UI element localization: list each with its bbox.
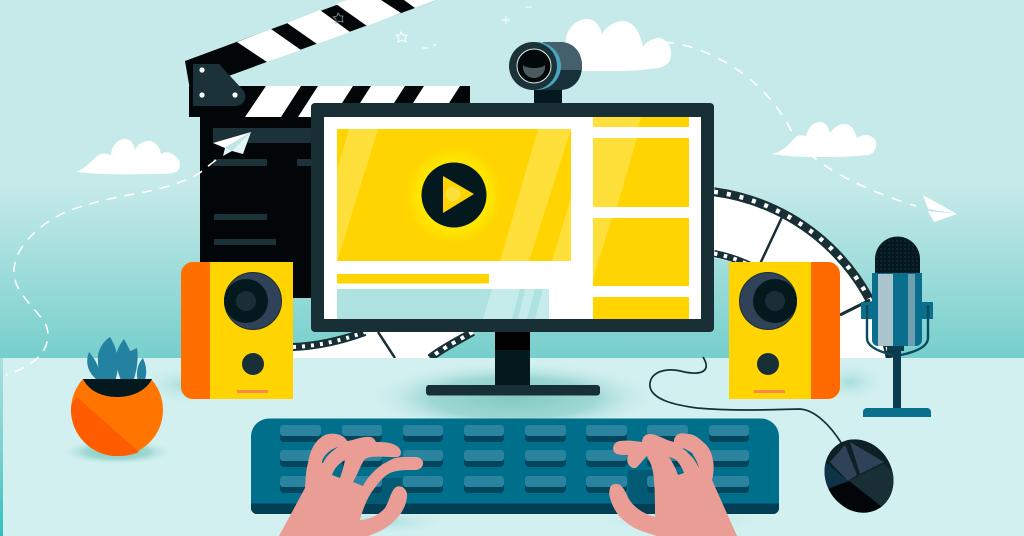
description block bbox=[337, 289, 549, 319]
webcam bbox=[509, 42, 582, 104]
webcam neck bbox=[534, 88, 562, 104]
clapper hinge bbox=[193, 64, 245, 106]
tweeter bbox=[757, 353, 779, 375]
keyboard body bbox=[251, 418, 779, 514]
desk bbox=[3, 358, 1024, 536]
play button bbox=[422, 162, 486, 228]
background sky bbox=[0, 0, 1024, 358]
pot bbox=[71, 379, 163, 456]
dashed path: right flight bbox=[664, 42, 916, 206]
main video bbox=[337, 129, 571, 262]
mic clips bbox=[861, 302, 872, 319]
plant bbox=[71, 337, 163, 456]
woofer bbox=[740, 272, 796, 330]
video title bar bbox=[337, 274, 489, 284]
webcam lens bbox=[509, 42, 557, 90]
monitor stand bbox=[426, 332, 600, 396]
sidebar thumbnails bbox=[593, 117, 689, 319]
mic body bbox=[872, 273, 922, 346]
film reel: right section bbox=[714, 188, 894, 358]
clapper lower bar bbox=[189, 86, 470, 117]
mouse cable bbox=[650, 357, 842, 444]
indicator bbox=[754, 390, 785, 393]
dashed path: left flight bbox=[6, 160, 216, 375]
mic stand bbox=[893, 350, 901, 408]
clapper stick bbox=[185, 0, 437, 90]
paper plane: right bbox=[923, 195, 957, 222]
hand: left bbox=[279, 434, 423, 536]
mic head bbox=[875, 236, 920, 273]
clapper body bbox=[200, 117, 340, 298]
paper plane: left bbox=[213, 132, 251, 156]
cloud: top centre bbox=[545, 19, 671, 71]
woofer bbox=[224, 272, 282, 330]
decorative stars bbox=[396, 7, 532, 48]
keyboard bbox=[251, 418, 779, 514]
webcam teal rim bbox=[513, 42, 561, 90]
mic cradle bbox=[867, 305, 928, 355]
mouse bbox=[824, 439, 894, 513]
monitor bbox=[311, 103, 714, 332]
clapper text lines bbox=[213, 128, 313, 245]
film reel: lower left section bbox=[293, 332, 473, 358]
key row 3 bbox=[280, 476, 749, 493]
key row 2 bbox=[280, 450, 749, 467]
plant leaves bbox=[87, 337, 146, 386]
speaker: left bbox=[181, 262, 293, 399]
soil bbox=[83, 379, 152, 397]
indicator bbox=[237, 390, 268, 393]
desk shadows bbox=[69, 367, 873, 530]
hand: right bbox=[609, 433, 737, 536]
microphone bbox=[861, 236, 933, 417]
cloud: left bbox=[76, 139, 180, 174]
tweeter bbox=[242, 353, 264, 375]
speaker: right bbox=[729, 262, 840, 399]
cloud: right bbox=[772, 122, 876, 157]
glow bbox=[405, 146, 503, 244]
left edge strip bbox=[0, 358, 3, 536]
webcam barrel bbox=[543, 42, 582, 90]
key row 1 bbox=[280, 425, 749, 442]
monitor screen bbox=[324, 117, 701, 319]
monitor frame bbox=[311, 103, 714, 332]
clapperboard bbox=[185, 0, 470, 298]
